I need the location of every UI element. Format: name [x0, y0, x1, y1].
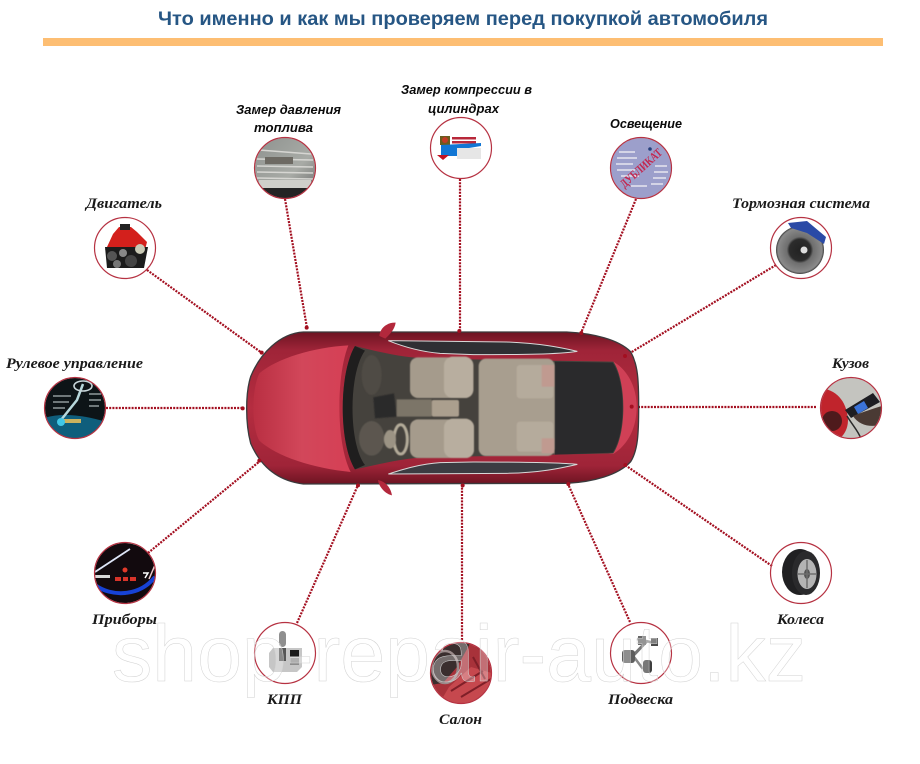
side windows: [388, 341, 577, 355]
label: instruments: Приборы: [91, 612, 157, 628]
connection dots: [241, 326, 634, 487]
trunk: [555, 362, 623, 455]
rear red panel: [607, 362, 637, 454]
item: brakes: [770, 217, 832, 279]
item: steering: [44, 377, 106, 439]
label: wheels: Колеса: [776, 612, 825, 628]
title: Что именно и как мы проверяем перед покупкой автомобиля: [158, 9, 768, 30]
label: gearbox: КПП: [266, 692, 303, 708]
label: lighting: Освещение: [610, 116, 682, 131]
title underline bar: [43, 38, 883, 46]
item: engine: [94, 218, 156, 278]
label: interior: Салон: [439, 712, 482, 728]
label: steering: Рулевое управление: [6, 356, 143, 372]
windshield shade: [343, 346, 365, 469]
item: suspension: [610, 622, 672, 684]
item: body paint gauge: [820, 377, 882, 439]
cabin: [343, 346, 623, 469]
label: fuel pressure: топлива: [254, 120, 313, 135]
label: fuel pressure: [236, 102, 341, 135]
hood: [253, 345, 351, 472]
label: compression: цилиндрах: [428, 101, 500, 116]
seats: [359, 355, 555, 458]
watermark: shop-repair-auto.kz: [112, 609, 806, 698]
label: compression: Замер компрессии в: [401, 82, 532, 97]
item: fuel pressure: [254, 137, 316, 200]
mirror bottom: [378, 480, 392, 495]
item: compression: [430, 117, 492, 179]
label: engine: Двигатель: [84, 196, 162, 212]
label: suspension: Подвеска: [607, 692, 674, 708]
car top view: [241, 323, 639, 495]
item: wheels: [770, 542, 832, 604]
label: brakes: Тормозная система: [732, 196, 871, 212]
item: gearbox: [254, 622, 316, 684]
label: compression: [401, 82, 532, 116]
item: interior: [430, 642, 492, 704]
item: lighting: ДУБЛИКАТ: [617, 145, 665, 191]
item: instruments: [94, 542, 156, 604]
label: body: Кузов: [831, 356, 869, 372]
label: fuel pressure: Замер давления: [236, 102, 341, 117]
dotted connector lines: [106, 179, 816, 640]
mirror top: [379, 323, 396, 339]
car shell: [247, 332, 639, 484]
